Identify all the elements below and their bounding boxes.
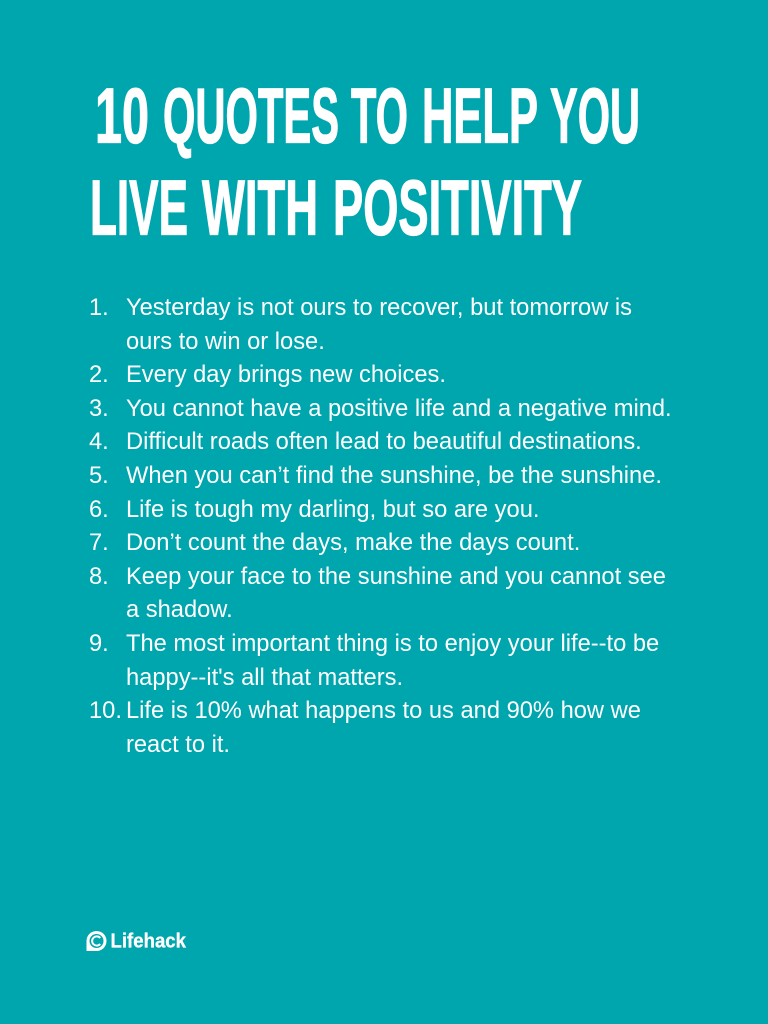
quote list [89, 295, 672, 758]
quote 1: 1. [89, 295, 109, 321]
title: YOU [550, 71, 640, 159]
title: QUOTES [163, 71, 339, 159]
quote 8 [89, 564, 666, 623]
quote 9: The most important thing is to enjoy your life--to be [126, 631, 659, 657]
quote 9 [89, 631, 659, 691]
quote 8: Keep your face to the sunshine and you cannot see [126, 564, 666, 590]
logo: Lifehack [86, 930, 187, 952]
quote 8: a shadow. [126, 597, 233, 623]
icon: Lifehack spiral bubble [86, 931, 107, 951]
quote 8: 8. [89, 564, 109, 590]
quote 10: 10. [89, 698, 122, 724]
quote 1: ours to win or lose. [126, 329, 325, 355]
quote 10: react to it. [126, 732, 230, 758]
quote 6: 6. [89, 497, 109, 523]
quote 3: 3. [89, 396, 109, 422]
title: TO [351, 71, 408, 159]
quote 4: Difficult roads often lead to beautiful destinations. [126, 429, 642, 455]
title: WITH [202, 163, 318, 251]
quote 7: Don’t count the days, make the days count. [126, 530, 580, 556]
quote 1 [89, 295, 632, 355]
quote 3: You cannot have a positive life and a negative mind. [126, 396, 672, 422]
quote 9: happy--it's all that matters. [126, 665, 403, 691]
quote 9: 9. [89, 631, 109, 657]
quote 6: Life is tough my darling, but so are you. [126, 497, 539, 523]
title: 10 [95, 71, 149, 159]
quote 1: Yesterday is not ours to recover, but tomorrow is [126, 295, 632, 321]
quote 4: 4. [89, 429, 109, 455]
quote 5: 5. [89, 463, 109, 489]
quote 2: Every day brings new choices. [126, 362, 446, 388]
quote 10 [89, 698, 641, 758]
title: POSITIVITY [333, 163, 582, 251]
title [90, 71, 640, 251]
title: HELP [422, 71, 538, 159]
quote 7: 7. [89, 530, 109, 556]
quote 10: Life is 10% what happens to us and 90% how we [126, 698, 641, 724]
wordmark: Lifehack [110, 930, 187, 952]
title: LIVE [90, 163, 188, 251]
quote 2: 2. [89, 362, 109, 388]
quote 5: When you can’t find the sunshine, be the sunshine. [126, 463, 662, 489]
